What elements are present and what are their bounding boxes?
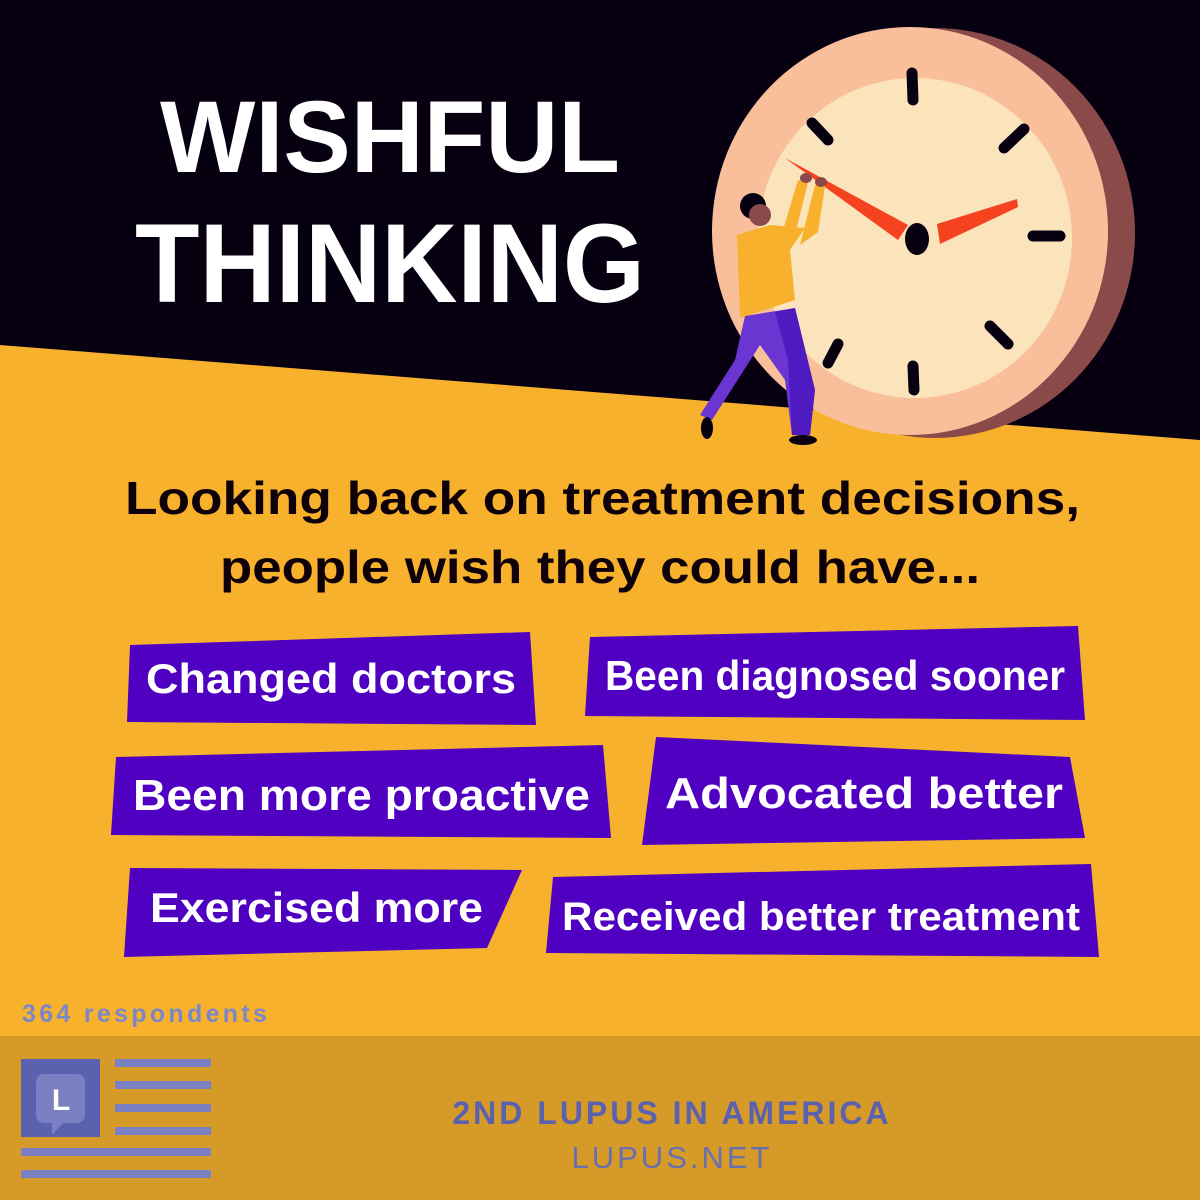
logo [21,1059,211,1178]
label: Been more proactive: Been more proactive [133,771,590,820]
subtitle: Looking back on treatment decisions, [125,472,1080,524]
respondents note: 364 respondents [22,1000,270,1028]
subtitle [125,472,1080,593]
footer text: 2ND LUPUS IN AMERICA [452,1095,892,1131]
label: Been more proactive [111,745,611,838]
footer band [0,1036,1200,1200]
label: Been diagnosed sooner [585,626,1085,720]
title: THINKING [135,201,645,326]
label: Changed doctors: Changed doctors [146,655,516,702]
label: Exercised more: Exercised more [150,884,483,931]
label: Received better treatment: Received better treatment [562,895,1080,939]
label: Advocated better: Advocated better [665,769,1063,818]
footer text: LUPUS.NET [572,1140,772,1175]
title: WISHFUL [160,80,620,194]
logo: L [52,1084,70,1117]
label: Received better treatment [546,864,1099,957]
title [135,80,645,326]
subtitle: people wish they could have... [220,541,980,593]
label: Exercised more [124,868,522,957]
label: Changed doctors [127,632,536,725]
dark top background [0,0,1200,440]
person [740,193,766,219]
label: Advocated better [642,737,1085,845]
footer text [452,1095,892,1175]
label: Been diagnosed sooner: Been diagnosed sooner [605,652,1065,699]
clock illustration [700,27,1135,445]
